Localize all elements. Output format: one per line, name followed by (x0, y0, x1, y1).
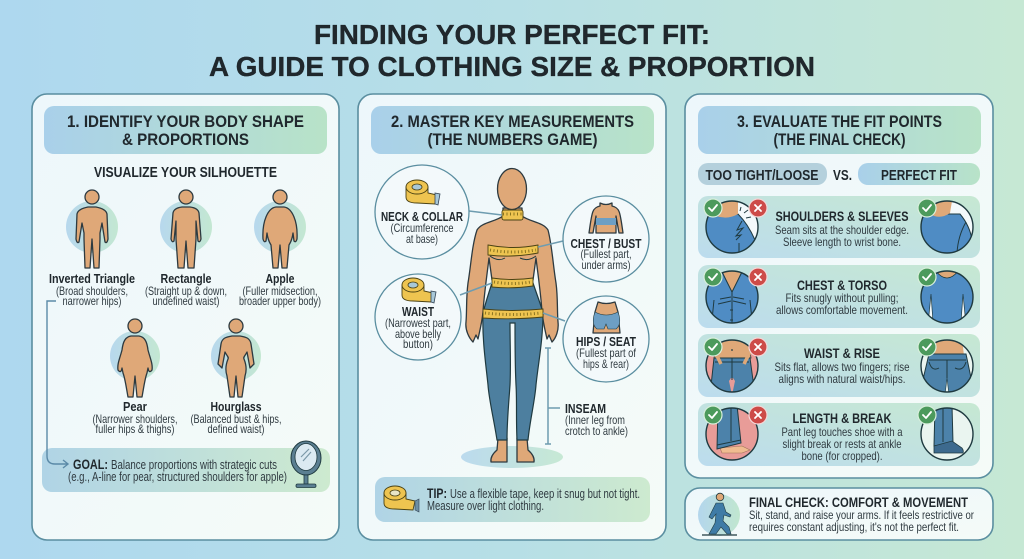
badges: check and cross (704, 199, 936, 424)
callout: tip (375, 477, 650, 522)
icon: walking person (698, 493, 740, 536)
panel: fit points (685, 94, 993, 478)
row: shoulders and sleeves (698, 196, 980, 258)
callout: inseam (545, 348, 628, 444)
text: waist and rise: WAIST & RISE (804, 346, 880, 361)
row: chest and torso (698, 265, 980, 328)
callout: goal: (e.g., A-line for pear, structured shoulders for apple) (68, 470, 287, 484)
text: shoulders and sleeves: Sleeve length to wrist bone. (783, 235, 901, 249)
callout: goal: GOAL: (73, 456, 108, 472)
label: inverted triangle (49, 271, 135, 308)
heading: identify body shape (44, 106, 327, 154)
label: too tight or loose: TOO TIGHT/LOOSE (706, 168, 819, 184)
panel: final check (685, 488, 993, 540)
callout: tip: TIP: (427, 485, 447, 501)
icon: right length (921, 405, 973, 460)
panel: measurements (358, 94, 666, 540)
callout: chest and bust (563, 196, 649, 282)
label: inverted triangle: narrower hips) (62, 294, 122, 308)
text: chest and torso: CHEST & TORSO (797, 278, 887, 293)
label: hourglass: (Balanced bust & hips, (190, 412, 282, 426)
heading: fit points (698, 106, 981, 154)
figure: apple (254, 190, 306, 268)
figure: pear (110, 319, 160, 397)
text: chest and torso: allows comfortable movement. (776, 303, 908, 317)
icon: good waist (920, 338, 974, 395)
text: waist and rise: aligns with natural waist/hips. (778, 372, 906, 386)
title: FINDING YOUR PERFECT FIT: (314, 19, 710, 50)
heading: identify body shape: & PROPORTIONS (122, 131, 249, 149)
label: too tight or loose (698, 163, 827, 185)
label: pear: fuller hips & thighs) (96, 422, 175, 436)
text: shoulders and sleeves: SHOULDERS & SLEEVES (776, 209, 908, 224)
callout: chest and bust: CHEST / BUST (570, 237, 642, 251)
row: waist and rise (698, 334, 980, 397)
callout: inseam: INSEAM (565, 402, 606, 416)
title (209, 19, 815, 82)
label: rectangle: Rectangle (160, 271, 212, 286)
callout: neck and collar: NECK & COLLAR (381, 210, 463, 224)
callout: waist (375, 274, 461, 360)
label: hourglass: defined waist) (208, 422, 264, 436)
text: shoulders and sleeves (775, 209, 909, 249)
icon: mirror (291, 441, 321, 488)
figure: measured body (461, 168, 563, 468)
icon: tight waist (706, 339, 758, 395)
text: length and break: bone (for cropped). (802, 449, 882, 463)
label: inverted triangle: Inverted Triangle (49, 271, 135, 286)
icon: good shirt (920, 270, 974, 324)
callout: hips and seat: HIPS / SEAT (576, 335, 636, 349)
panel: body shape (32, 94, 339, 540)
figure: inverted triangle (66, 190, 118, 268)
heading: measurements: (THE NUMBERS GAME) (428, 131, 598, 149)
callout: hips and seat: hips & rear) (583, 357, 629, 371)
callout: neck and collar: (Circumference (390, 221, 454, 235)
text: length and break: LENGTH & BREAK (792, 411, 892, 426)
label: hourglass: Hourglass (210, 399, 262, 414)
subheading: visualize silhouette: VISUALIZE YOUR SILHOUETTE (94, 165, 277, 181)
title: A GUIDE TO CLOTHING SIZE & PROPORTION (209, 51, 815, 82)
icon: wrong length (706, 405, 758, 460)
label: apple: broader upper body) (239, 294, 321, 308)
text: chest and torso (776, 278, 908, 317)
label: perfect fit (858, 163, 980, 185)
callout: chest and bust: (Fullest part, (580, 247, 632, 261)
callout: waist: (Narrowest part, (385, 316, 451, 330)
text: waist and rise: Sits flat, allows two fingers; rise (774, 360, 910, 374)
label: apple: (Fuller midsection, (242, 284, 318, 298)
heading: identify body shape: 1. IDENTIFY YOUR BODY SHAPE (67, 113, 304, 131)
label: pear: (Narrower shoulders, (92, 412, 178, 426)
icon: hips (593, 302, 620, 333)
heading: measurements (371, 106, 654, 154)
label: rectangle: undefined waist) (152, 294, 220, 308)
figure: hourglass (211, 319, 261, 397)
icon: tape measure (406, 180, 440, 205)
text: final check: requires constant adjusting, it's not the perfect fit. (749, 520, 959, 534)
callout: waist: above belly (395, 327, 441, 341)
text: length and break (782, 411, 903, 463)
callout: hips and seat (563, 296, 649, 382)
icon: good shoulder (918, 201, 973, 256)
icon: tight shirt (705, 270, 759, 324)
callout: goal (42, 441, 330, 492)
callout: inseam: (Inner leg from (565, 413, 625, 427)
icon: tape measure (384, 486, 419, 512)
text: waist and rise (774, 346, 910, 386)
text: shoulders and sleeves: Seam sits at the shoulder edge. (775, 223, 909, 237)
icon: torso with bra (589, 203, 623, 233)
callout: tip: Measure over light clothing. (427, 499, 544, 513)
text: final check: Sit, stand, and raise your arms. If it feels restrictive or (749, 508, 974, 522)
label: apple: Apple (266, 271, 294, 286)
arrow: body shape to goal (47, 301, 68, 468)
text: length and break: slight break or rests at ankle (782, 437, 902, 451)
icon: tight shoulder (702, 201, 758, 256)
figure: rectangle (160, 190, 212, 268)
label: rectangle: (Straight up & down, (145, 284, 227, 298)
label: hourglass (190, 399, 282, 436)
heading: measurements: 2. MASTER KEY MEASUREMENTS (391, 113, 634, 131)
callout: tip: Use a flexible tape, keep it snug but not tight. (450, 487, 640, 501)
callout: hips and seat: (Fullest part of (576, 346, 637, 360)
callout: goal: Balance proportions with strategic cuts (111, 458, 277, 472)
label: pear (92, 399, 178, 436)
callout: inseam: crotch to ankle) (565, 424, 628, 438)
label: pear: Pear (123, 399, 147, 414)
label: rectangle (145, 271, 227, 308)
tape marks on body (483, 210, 543, 319)
text: length and break: Pant leg touches shoe with a (782, 425, 903, 439)
text: final check: FINAL CHECK: COMFORT & MOVEMENT (749, 495, 969, 510)
callout: neck and collar (375, 165, 469, 259)
heading: fit points: (THE FINAL CHECK) (774, 131, 906, 149)
label: inverted triangle: (Broad shoulders, (56, 284, 128, 298)
text: chest and torso: Fits snugly without pulling; (786, 291, 898, 305)
heading: fit points: 3. EVALUATE THE FIT POINTS (737, 113, 942, 131)
callout: waist: button) (403, 337, 433, 351)
text: final check (749, 495, 974, 534)
label: apple (239, 271, 321, 308)
connector lines (460, 211, 565, 321)
row: length and break (698, 403, 980, 466)
label: versus: VS. (833, 168, 852, 184)
label: perfect fit: PERFECT FIT (881, 168, 957, 184)
icon: tape measure (402, 278, 436, 303)
callout: waist: WAIST (402, 305, 434, 319)
callout: chest and bust: under arms) (582, 258, 631, 272)
callout: neck and collar: at base) (406, 232, 438, 246)
